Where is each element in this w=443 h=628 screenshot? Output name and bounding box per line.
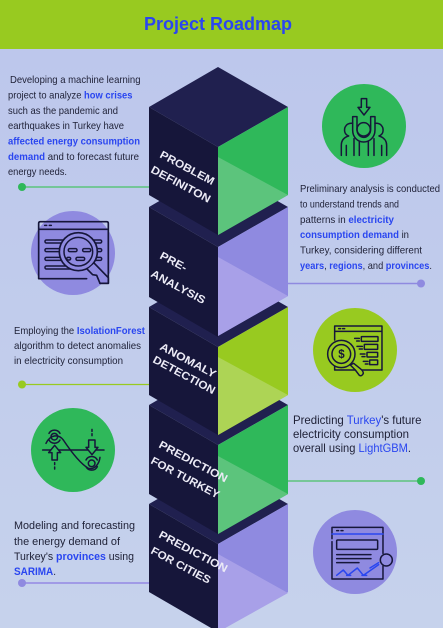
header band [0, 0, 443, 49]
icon: magnet attracting people [322, 84, 406, 168]
cube label: prediction for cities: FOR CITIES [149, 545, 212, 587]
text block: prediction for cities [14, 520, 135, 578]
text block: problem definition: Developing a machine learning [10, 75, 140, 86]
icon: report window with chart [313, 510, 397, 594]
text block: pre-analysis: patterns in electricity [300, 215, 394, 226]
icon: magnifier with dollar over report [313, 308, 397, 392]
cube label: prediction for Turkey: FOR TURKEY [149, 455, 222, 502]
connector line: prediction for cities [18, 579, 150, 587]
text block: prediction for cities: SARIMA. [14, 566, 56, 578]
title: Project Roadmap [144, 14, 292, 34]
text block: anomaly detection: algorithm to detect anomalies [14, 341, 141, 352]
text block: anomaly detection [14, 326, 146, 367]
cube: prediction for cities [149, 464, 288, 628]
text block: problem definition: affected energy consumption [8, 136, 140, 148]
connector line: pre-analysis [287, 280, 425, 288]
text block: problem definition: demand and to forecast future [8, 152, 139, 163]
cube: pre-analysis [149, 167, 288, 337]
cube label: prediction for Turkey [149, 439, 229, 502]
cube label: problem definition [149, 149, 216, 206]
text block: problem definition: project to analyze how crises [8, 90, 133, 102]
connector line: prediction for Turkey [287, 477, 425, 485]
text block: prediction for cities: the energy demand of [14, 536, 121, 548]
text block: pre-analysis: Turkey, considering different [300, 246, 422, 256]
text block: pre-analysis: years, regions, and provinces. [300, 261, 432, 272]
cube label: problem definition: DEFINITON [149, 164, 213, 206]
text block: pre-analysis: to understand trends and [300, 200, 399, 210]
cube: problem definition [149, 67, 288, 235]
text block: problem definition: energy needs. [8, 167, 67, 178]
text block: pre-analysis [300, 184, 440, 272]
text block: anomaly detection: Employing the IsolationForest [14, 326, 146, 337]
text block: prediction for Turkey [293, 414, 422, 455]
cube label: anomaly detection: DETECTION [151, 354, 217, 397]
cube: prediction for Turkey [149, 365, 288, 534]
text block: problem definition [8, 75, 140, 178]
icon glyph: dollar sign: $ [338, 349, 345, 361]
connector line: anomaly detection [18, 380, 150, 388]
text block: problem definition: such as the pandemic and [8, 106, 118, 117]
text block: problem definition: earthquakes in Turkey have [8, 121, 124, 132]
text block: pre-analysis: consumption demand in [300, 230, 409, 241]
cube label: prediction for cities: PREDICTION [157, 529, 229, 575]
icon: magnifier over data window [31, 211, 115, 295]
cube label: anomaly detection: ANOMALY [158, 341, 219, 381]
text block: anomaly detection: in electricity consumption [14, 356, 123, 367]
text block: prediction for Turkey: Predicting Turkey's future [293, 414, 422, 427]
text block: prediction for cities: Turkey's provinces using [14, 551, 134, 563]
text block: prediction for Turkey: overall using LightGBM. [293, 442, 411, 455]
cube: anomaly detection [149, 267, 288, 435]
icon: up and down arrows on wave [31, 408, 115, 492]
connector line: problem definition [18, 183, 150, 191]
cube label: pre-analysis [149, 250, 207, 307]
cube label: pre-analysis: PRE- [158, 250, 189, 274]
text block: prediction for Turkey: electricity consumption [293, 428, 409, 441]
text block: prediction for cities: Modeling and forecasting [14, 520, 135, 532]
cube label: pre-analysis: ANALYSIS [149, 268, 207, 307]
cube label: problem definition: PROBLEM [158, 149, 216, 188]
cube label: anomaly detection [151, 341, 219, 397]
cube label: prediction for Turkey: PREDICTION [157, 439, 229, 485]
cube label: prediction for cities [149, 529, 229, 587]
